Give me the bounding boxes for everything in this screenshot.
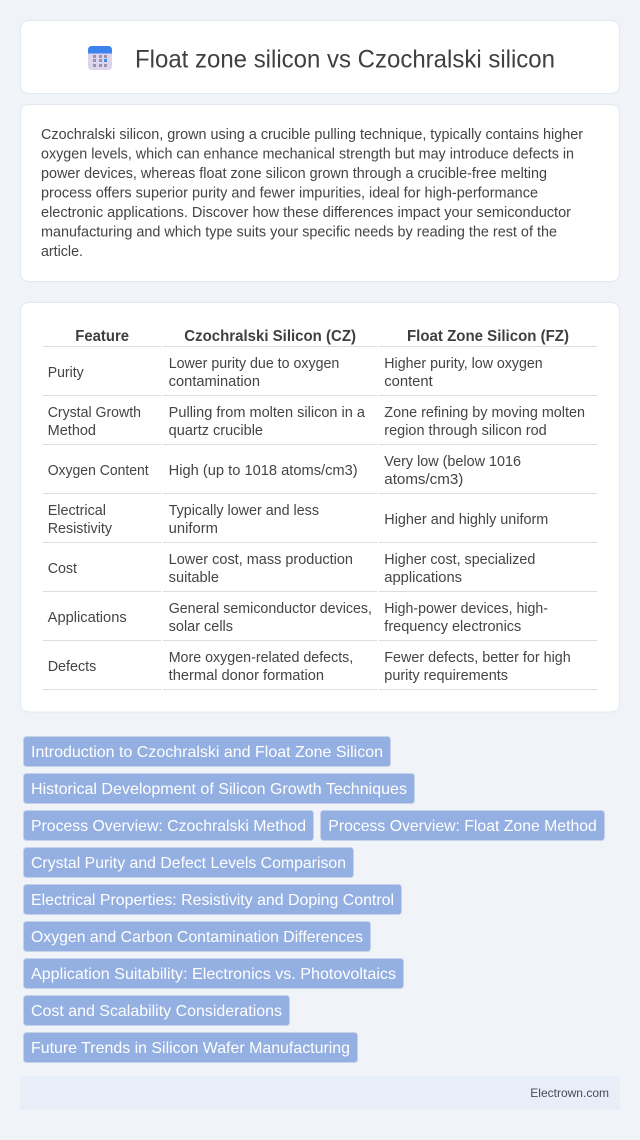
table row: electrical resistivity: Resistivity (48, 521, 113, 537)
tag: future trends: Future Trends in Silicon Wafer Manufacturing (31, 1040, 350, 1057)
table row: purity: Lower purity due to oxygen (169, 356, 339, 372)
table row: electrical resistivity (43, 503, 597, 543)
table row: defects: purity requirements (384, 668, 508, 684)
panel: comparison table (20, 302, 620, 712)
icon: calendar grid (88, 46, 112, 70)
table header row: Feature (75, 328, 129, 345)
table row: defects: Defects (48, 659, 96, 675)
table row: purity: Higher purity, low oxygen (384, 356, 543, 372)
table header row: Float Zone Silicon (FZ) (407, 328, 569, 345)
table row: cost: Higher cost, specialized (384, 552, 535, 568)
tag: float zone process: Process Overview: Float Zone Method (328, 818, 597, 835)
table row: oxygen content: Oxygen Content (48, 463, 149, 479)
tag: application suitability (24, 958, 404, 988)
table row: electrical resistivity: Higher and highly uniform (384, 512, 548, 528)
table row: applications: frequency electronics (384, 619, 521, 635)
panel: introduction text: manufacturing and which type suits your specific needs by reading the rest of the (41, 224, 557, 240)
tag: future trends (24, 1032, 358, 1062)
table row: crystal growth method: Zone refining by moving molten (384, 405, 585, 421)
panel: introduction text: electronic applications. Discover how these differences impact your semiconductor (41, 205, 571, 221)
panel: topic tags (24, 736, 604, 1062)
tag: contamination (24, 922, 370, 952)
table row: oxygen content: Very low (below 1016 (384, 454, 521, 470)
tag: crystal purity (24, 848, 354, 878)
table row: applications: General semiconductor devices, (169, 601, 372, 617)
tag: introduction: Introduction to Czochralski and Float Zone Silicon (31, 744, 383, 761)
table row: oxygen content: High (up to 1018 atoms/cm3) (169, 463, 358, 479)
table row: oxygen content: atoms/cm3) (384, 472, 463, 488)
table row: cost: applications (384, 570, 462, 586)
tag: Czochralski process: Process Overview: Czochralski Method (31, 818, 306, 835)
footer: source credit: Electrown.com (530, 1086, 609, 1100)
table row: purity: content (384, 374, 433, 390)
panel: introduction text: article. (41, 244, 83, 260)
table row: applications: High-power devices, high- (384, 601, 548, 617)
footer: source credit (20, 1076, 620, 1110)
table row: purity: contamination (169, 374, 260, 390)
panel: introduction text (20, 104, 620, 282)
table row: crystal growth method: Method (48, 423, 96, 439)
table row: oxygen content (43, 454, 597, 494)
tag: float zone process (320, 810, 604, 840)
table row: defects: Fewer defects, better for high (384, 650, 571, 666)
table row: electrical resistivity: Typically lower and less (169, 503, 319, 519)
panel: title header (20, 20, 620, 94)
table row: electrical resistivity: Electrical (48, 503, 106, 519)
table row: cost (43, 552, 597, 592)
table row: applications: Applications (48, 610, 127, 626)
table header row: Czochralski Silicon (CZ) (184, 328, 356, 345)
title: Float zone silicon vs Czochralski silicon (135, 46, 555, 74)
table row: cost: Cost (48, 561, 77, 577)
tag: contamination: Oxygen and Carbon Contamination Differences (31, 929, 363, 946)
panel: introduction text: oxygen levels, which can enhance mechanical strength but may introduce defects in (41, 146, 574, 162)
table row: crystal growth method (43, 405, 597, 445)
tag: crystal purity: Crystal Purity and Defect Levels Comparison (31, 855, 346, 872)
table row: defects: More oxygen-related defects, (169, 650, 353, 666)
table header row (43, 328, 597, 347)
table row: applications: solar cells (169, 619, 233, 635)
tag: introduction (24, 736, 390, 766)
tag: Czochralski process (24, 810, 314, 840)
table row: purity: Purity (48, 365, 84, 381)
table row: cost: Lower cost, mass production (169, 552, 353, 568)
tag: cost and scalability (24, 996, 290, 1026)
table row: electrical resistivity: uniform (169, 521, 218, 537)
panel: introduction text: Czochralski silicon, grown using a crucible pulling technique, typically contains higher (41, 127, 583, 143)
tag: cost and scalability: Cost and Scalability Considerations (31, 1003, 282, 1020)
table row: defects: thermal donor formation (169, 668, 324, 684)
table row: purity (43, 356, 597, 396)
panel: introduction text: process offers superior purity and fewer impurities, ideal for high-performance (41, 186, 538, 202)
table row: defects (43, 650, 597, 690)
tag: electrical properties (24, 884, 402, 914)
panel: introduction text: power devices, whereas float zone silicon grown through a crucible-free melting (41, 166, 547, 182)
table row: applications (43, 601, 597, 641)
tag: historical development: Historical Development of Silicon Growth Techniques (31, 781, 407, 798)
tag: electrical properties: Electrical Properties: Resistivity and Doping Control (31, 892, 394, 909)
table row: crystal growth method: Crystal Growth (48, 405, 141, 421)
tag: historical development (24, 774, 414, 804)
table row: crystal growth method: Pulling from molten silicon in a (169, 405, 365, 421)
table row: crystal growth method: quartz crucible (169, 423, 263, 439)
tag: application suitability: Application Suitability: Electronics vs. Photovoltaics (31, 966, 396, 983)
table row: crystal growth method: region through silicon rod (384, 423, 547, 439)
table row: cost: suitable (169, 570, 219, 586)
